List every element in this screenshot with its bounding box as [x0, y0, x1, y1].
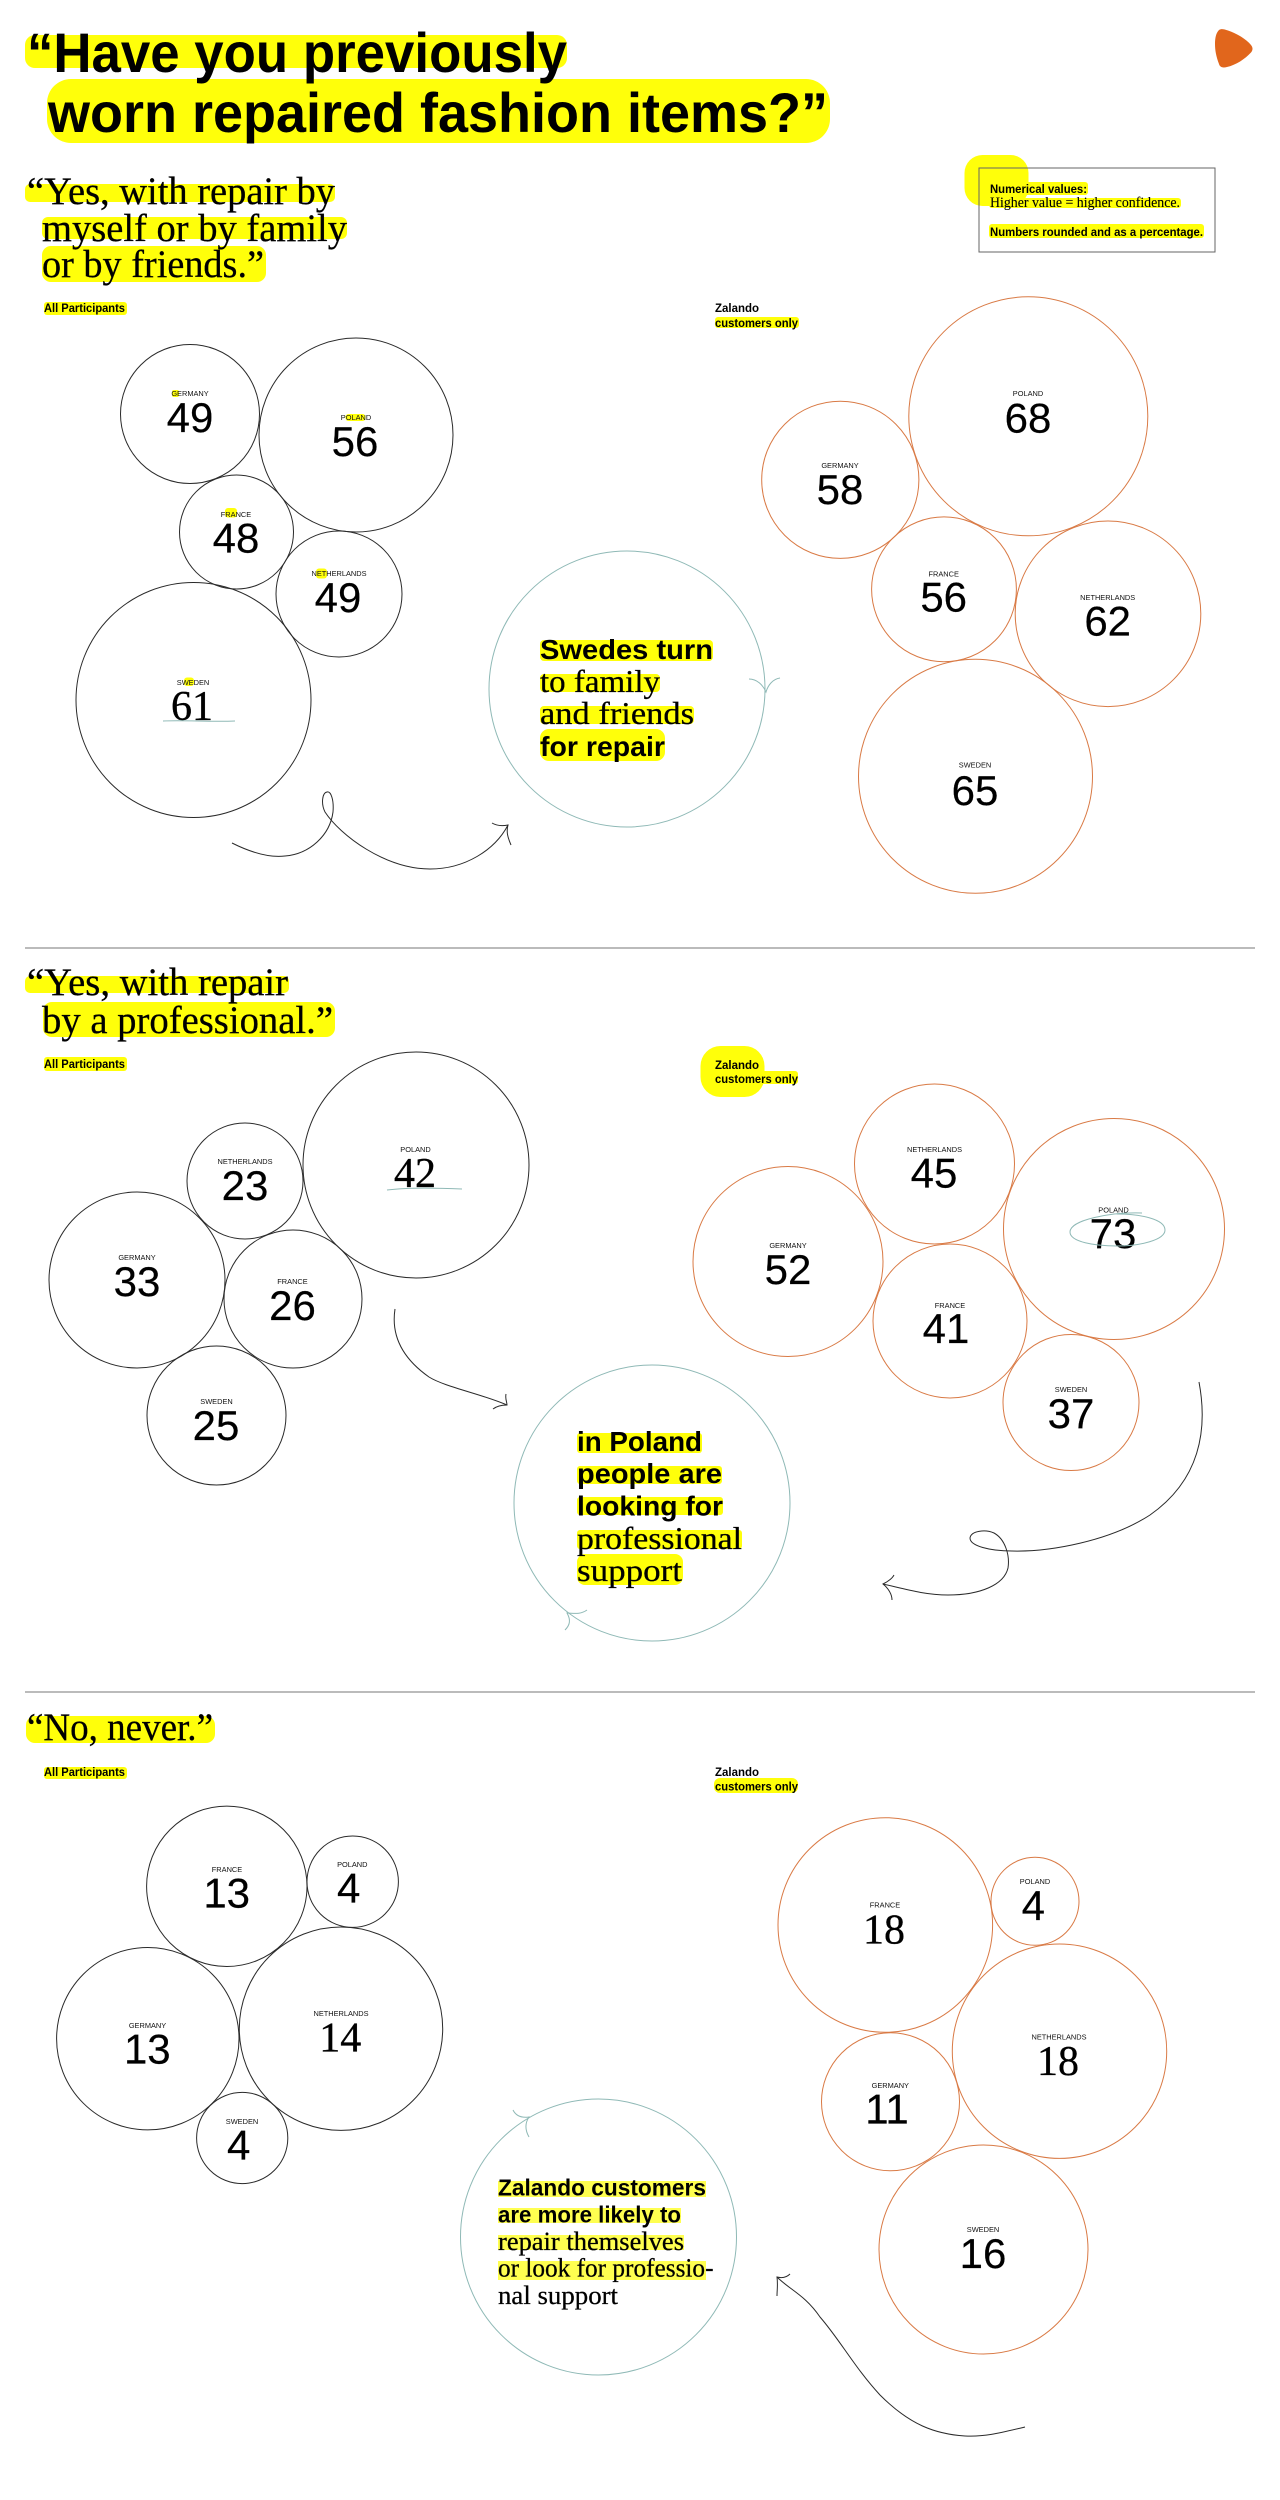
- callout: Zalando customers more likely: are more likely to: [498, 2202, 681, 2228]
- callout: Zalando customers more likely: [460, 2099, 736, 2375]
- bubble: Zalando Poland 68: 68: [1005, 395, 1051, 442]
- callout: Poland professional support: professional: [577, 1520, 742, 1556]
- bubble: Poland 4: [307, 1836, 398, 1927]
- label: zalando customers only: customers only: [715, 1780, 798, 1794]
- bubble: Zalando Netherlands 18: [952, 1944, 1167, 2158]
- bubble: Zalando Netherlands 62: [1015, 521, 1201, 707]
- bubble: Netherlands 23: NETHERLANDS: [217, 1157, 273, 1166]
- bubble: France 26: [224, 1230, 362, 1368]
- bubble: Zalando Germany 58: GERMANY: [821, 461, 859, 470]
- callout: Swedes turn to family: to family: [540, 663, 660, 699]
- bubble: Poland 56: POLAND: [341, 413, 371, 422]
- bubble: Germany 33: 33: [114, 1258, 160, 1305]
- bubble: Zalando Germany 52: GERMANY: [769, 1241, 807, 1250]
- callout: Zalando customers more likely: repair themselves: [498, 2227, 684, 2256]
- heading: self, family or friends: or by friends.”: [42, 243, 264, 286]
- callout: Poland professional support: looking for: [577, 1490, 723, 1522]
- bubble: Zalando Poland 73: 73: [1090, 1210, 1136, 1257]
- legend box: numerical values: Numerical values:: [990, 182, 1087, 196]
- bubble: France 13: [147, 1806, 307, 1967]
- bubble: Zalando Germany 52: 52: [765, 1246, 811, 1293]
- label: all participants: All Participants: [44, 301, 125, 315]
- bubble: Poland 42: [303, 1052, 529, 1278]
- legend box: numerical values: Higher value = higher confidence.: [990, 195, 1180, 211]
- bubble: Zalando Germany 11: 11: [865, 2085, 909, 2132]
- bubble: Zalando Sweden 16: SWEDEN: [967, 2225, 999, 2234]
- heading: by a professional: “Yes, with repair: [27, 961, 288, 1004]
- callout: Swedes turn to family: for repair: [540, 731, 665, 762]
- heading: by a professional: [25, 961, 335, 1042]
- bubble: Sweden 61: SWEDEN: [177, 678, 209, 687]
- bubble: Zalando Netherlands 45: [854, 1084, 1014, 1244]
- label: zalando customers only: Zalando: [715, 1765, 759, 1779]
- heading: self, family or friends: myself or by family: [42, 207, 347, 250]
- bubble: Zalando France 18: [778, 1818, 993, 2032]
- callout: Poland professional support: people are: [577, 1458, 722, 1489]
- bubble: Zalando Sweden 65: SWEDEN: [959, 761, 991, 770]
- bubble: France 48: FRANCE: [221, 510, 251, 519]
- bubble: Sweden 4: [197, 2092, 288, 2184]
- bubble: Germany 49: [120, 344, 260, 484]
- bubble: Netherlands 14: [239, 1927, 443, 2130]
- bubble: Sweden 61: [76, 582, 311, 818]
- bubble: Zalando Germany 58: [762, 401, 919, 558]
- bubble: Zalando Germany 11: [822, 2033, 960, 2171]
- bubble: Poland 56: 56: [332, 418, 378, 465]
- arrow: to Swedes callout: [232, 792, 511, 869]
- bubble: Sweden 25: 25: [193, 1402, 239, 1449]
- callout: Zalando customers more likely: Zalando customers: [498, 2175, 706, 2201]
- bubble: Sweden 25: SWEDEN: [200, 1397, 233, 1406]
- title: worn repaired fashion items?”: [47, 81, 828, 144]
- bubble: Sweden 4: SWEDEN: [226, 2117, 258, 2126]
- bubble: Sweden 61: 61: [171, 684, 213, 730]
- bubble: Netherlands 23: [187, 1123, 303, 1239]
- bubble: Zalando Sweden 65: [858, 659, 1092, 893]
- bubble: France 48: [180, 475, 294, 589]
- label: all participants: All Participants: [44, 1057, 125, 1071]
- bubble: Zalando France 56: 56: [920, 574, 967, 621]
- label: zalando customers only: [714, 1765, 798, 1794]
- panel: repair by self, family or friends: [25, 170, 1201, 893]
- bubble: Zalando Germany 11: GERMANY: [872, 2081, 909, 2090]
- bubble: Germany 49: 49: [167, 394, 213, 441]
- bubble: Zalando Sweden 16: 16: [960, 2230, 1006, 2277]
- bubble: Zalando Sweden 16: [879, 2145, 1088, 2354]
- bubble: Zalando France 18: FRANCE: [870, 1901, 900, 1910]
- label: all participants: All Participants: [44, 1765, 125, 1779]
- callout: Zalando customers more likely: nal support: [498, 2281, 619, 2310]
- callout: Zalando customers more likely: or look for professio-: [498, 2254, 714, 2283]
- bubble: Zalando Poland 4: 4: [1022, 1882, 1045, 1929]
- label: zalando customers only: Zalando: [715, 301, 759, 315]
- bubble: Netherlands 49: [276, 531, 402, 657]
- callout: Swedes turn to family: [489, 551, 780, 827]
- bubble: Netherlands 49: NETHERLANDS: [311, 569, 367, 578]
- bubble: Sweden 25: [147, 1346, 286, 1485]
- heading: self, family or friends: [25, 170, 347, 286]
- heading: no, never: “No, never.”: [27, 1706, 213, 1749]
- bubble: Zalando France 41: 41: [923, 1305, 969, 1352]
- bubble: Zalando Netherlands 18: NETHERLANDS: [1031, 2033, 1087, 2042]
- icon: brand logo: [1215, 29, 1252, 67]
- bubble: Netherlands 49: 49: [315, 574, 361, 621]
- panel: repair by a professional: [25, 961, 1224, 1641]
- legend box: numerical values: Numbers rounded and as a percentage.: [990, 225, 1203, 239]
- bubble: Zalando Netherlands 45: NETHERLANDS: [907, 1145, 962, 1154]
- bubble: Germany 49: GERMANY: [171, 389, 209, 398]
- bubble: Germany 13: 13: [124, 2026, 171, 2073]
- bubble: France 13: FRANCE: [212, 1865, 242, 1874]
- callout: Poland professional support: support: [577, 1552, 682, 1588]
- label: zalando customers only: [715, 301, 799, 330]
- bubble: Sweden 4: 4: [227, 2121, 250, 2168]
- bubble: Zalando France 41: [873, 1244, 1027, 1398]
- bubble: Zalando Poland 73: POLAND: [1098, 1206, 1129, 1215]
- bubble: France 26: FRANCE: [277, 1277, 308, 1286]
- bubble: Netherlands 23: 23: [222, 1162, 268, 1209]
- bubble: Poland 4: POLAND: [337, 1860, 368, 1869]
- heading: by a professional: by a professional.”: [42, 999, 333, 1042]
- bubble: Poland 4: 4: [337, 1865, 360, 1912]
- bubble: Zalando France 56: [872, 517, 1016, 662]
- bubble: Zalando Poland 73: [1004, 1118, 1224, 1340]
- label: zalando customers only: customers only: [715, 316, 798, 330]
- title: “Have you previously: [27, 21, 567, 84]
- bubble: Poland 56: [259, 338, 453, 532]
- bubble: Zalando France 41: FRANCE: [935, 1301, 965, 1310]
- panel: never repaired: [26, 1706, 1167, 2436]
- bubble: Germany 13: GERMANY: [129, 2021, 166, 2030]
- callout: Swedes turn to family: and friends: [540, 695, 694, 731]
- label: zalando customers only: customers only: [715, 1072, 798, 1086]
- bubble: Netherlands 14: NETHERLANDS: [313, 2009, 369, 2018]
- bubble: Poland 42: 42: [394, 1151, 436, 1197]
- bubble: Netherlands 14: 14: [319, 2016, 361, 2062]
- bubble: Zalando Poland 68: POLAND: [1013, 389, 1043, 398]
- callout: Poland professional support: [514, 1365, 790, 1641]
- bubble: France 13: 13: [203, 1870, 250, 1917]
- bubble: Zalando Poland 68: [909, 297, 1148, 536]
- bubble: Zalando Sweden 37: 37: [1048, 1390, 1094, 1437]
- bubble: Zalando Sweden 65: 65: [952, 767, 998, 814]
- callout: Poland professional support: in Poland: [577, 1426, 702, 1457]
- bubble: Zalando Sweden 37: SWEDEN: [1055, 1385, 1087, 1394]
- bubble: Zalando Sweden 37: [1003, 1334, 1139, 1470]
- bubble: France 48: 48: [213, 514, 259, 562]
- title: [25, 21, 830, 144]
- bubble: Zalando Poland 4: POLAND: [1020, 1877, 1050, 1886]
- label: zalando customers only: Zalando: [715, 1058, 759, 1072]
- bubble: Zalando Netherlands 62: 62: [1084, 598, 1131, 645]
- bubble: Germany 33: GERMANY: [118, 1253, 156, 1262]
- bubble: Zalando Netherlands 18: 18: [1037, 2039, 1079, 2085]
- bubble: Zalando Germany 52: [693, 1166, 883, 1356]
- bubble: Zalando Germany 58: 58: [817, 466, 863, 513]
- bubble: Zalando Poland 4: [991, 1857, 1079, 1945]
- arrow: to Poland callout from Zalando customers: [883, 1382, 1202, 1600]
- heading: self, family or friends: “Yes, with repair by: [27, 170, 335, 213]
- bubble: Zalando Netherlands 45: 45: [911, 1150, 957, 1197]
- arrow: to Poland callout from all participants: [394, 1309, 507, 1409]
- bubble: Zalando France 56: FRANCE: [929, 570, 959, 579]
- label: zalando customers only: [700, 1046, 798, 1097]
- callout: Swedes turn to family: Swedes turn: [540, 634, 713, 665]
- legend box: numerical values: [964, 155, 1215, 252]
- bubble: Zalando Netherlands 62: NETHERLANDS: [1080, 593, 1135, 602]
- bubble: Germany 13: [57, 1948, 239, 2130]
- bubble: Poland 42: POLAND: [400, 1145, 431, 1154]
- arrow: to Zalando callout: [777, 2274, 1025, 2436]
- bubble: Zalando France 18: 18: [863, 1907, 905, 1953]
- bubble: France 26: 26: [269, 1282, 316, 1329]
- bubble: Germany 33: [49, 1192, 225, 1368]
